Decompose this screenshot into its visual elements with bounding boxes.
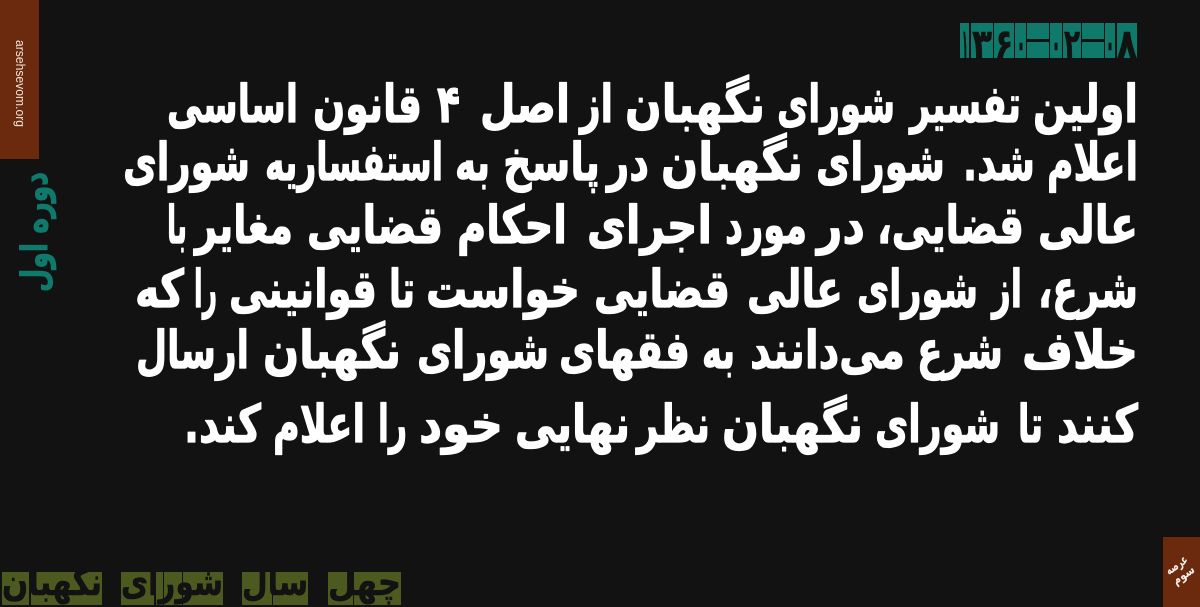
line 3: مغایر bbox=[193, 196, 293, 256]
line 2: در bbox=[605, 133, 649, 193]
logo calligraphy bbox=[1163, 552, 1198, 588]
line 5: ارسال bbox=[136, 321, 249, 381]
line 2: به bbox=[455, 133, 490, 193]
line 4: که bbox=[135, 260, 185, 320]
line 2: شد. bbox=[963, 133, 1035, 193]
line 3: با bbox=[167, 196, 187, 256]
series title: نگهبان bbox=[2, 560, 102, 604]
period label: دوره اول bbox=[15, 172, 56, 292]
logo tab bbox=[1163, 537, 1200, 607]
line 4: قضایی bbox=[594, 260, 730, 320]
line 6: نهایی bbox=[515, 395, 630, 455]
line 2: شورای bbox=[123, 133, 250, 193]
series title: چهل bbox=[328, 560, 401, 604]
line 4: شورای bbox=[857, 260, 978, 320]
line 6: خود bbox=[419, 395, 503, 455]
line 4: تا bbox=[389, 260, 415, 320]
line 3: قضایی، bbox=[877, 196, 1024, 256]
line 4: را bbox=[194, 260, 217, 320]
line 5: به bbox=[702, 321, 735, 381]
line 6: نظر bbox=[635, 395, 710, 455]
line 3: عالی bbox=[1038, 196, 1138, 256]
line 6: کند. bbox=[184, 395, 262, 455]
line 3: احکام bbox=[457, 196, 567, 256]
main text block bbox=[123, 74, 1139, 455]
line 1: تفسیر bbox=[908, 75, 1021, 135]
line 6: تا bbox=[1018, 395, 1043, 455]
line 6: اعلام bbox=[273, 395, 365, 455]
date stamp bbox=[960, 20, 1137, 68]
line 6: نگهبان bbox=[722, 394, 863, 455]
line 1: نگهبان bbox=[625, 74, 765, 135]
line 3: مورد bbox=[725, 196, 807, 256]
line 6: را bbox=[378, 395, 407, 455]
line 1: اساسی bbox=[167, 75, 298, 135]
line 1: اصل bbox=[480, 75, 570, 135]
series title bbox=[2, 560, 401, 605]
line 1: قانون bbox=[313, 75, 422, 135]
line 5: خلاف bbox=[1022, 321, 1138, 381]
date stamp: ۲ bbox=[1064, 20, 1080, 68]
date stamp: ۰ bbox=[1016, 20, 1026, 68]
line 5: می‌دانند bbox=[750, 321, 905, 381]
line 1: از bbox=[578, 75, 613, 135]
date stamp: ۰ bbox=[1105, 20, 1115, 68]
line 1: اولین bbox=[1033, 75, 1138, 135]
line 4: شرع، bbox=[1038, 260, 1138, 320]
line 2: نگهبان bbox=[661, 132, 803, 193]
line 4: قوانینی bbox=[229, 260, 377, 320]
line 3: قضایی bbox=[307, 196, 443, 256]
line 1: شورای bbox=[777, 75, 895, 135]
line 6 bbox=[184, 394, 1139, 455]
date stamp: ۸ bbox=[1117, 20, 1137, 68]
line 6: کنند bbox=[1057, 395, 1139, 455]
line 1: ۴ bbox=[437, 75, 460, 135]
line 3: اجرای bbox=[587, 196, 712, 256]
line 4: خواست bbox=[426, 260, 580, 320]
line 2: شورای bbox=[816, 133, 945, 193]
line 2: اعلام bbox=[1047, 133, 1138, 193]
line 2: استفساریه bbox=[265, 133, 443, 193]
line 5: نگهبان bbox=[263, 320, 401, 381]
line 1 bbox=[167, 74, 1138, 135]
website label: arsehsevom.org bbox=[13, 40, 27, 127]
line 4: از bbox=[990, 260, 1022, 320]
date stamp: ۱ bbox=[962, 20, 968, 68]
line 6: شورای bbox=[875, 395, 1000, 455]
line 4: عالی bbox=[747, 260, 843, 320]
line 3: در bbox=[814, 196, 865, 256]
series title: سال bbox=[242, 560, 308, 604]
panel: website tab bbox=[0, 0, 39, 159]
line 2: پاسخ bbox=[503, 133, 600, 193]
date stamp: ۳ bbox=[972, 20, 992, 68]
date stamp: ۰ bbox=[1051, 20, 1061, 68]
line 5: شرع bbox=[917, 321, 1003, 381]
date stamp: ۶ bbox=[995, 20, 1013, 68]
line 2 bbox=[123, 132, 1138, 193]
line 3 bbox=[167, 196, 1138, 256]
line 5: شورای bbox=[417, 321, 549, 381]
line 5 bbox=[136, 320, 1138, 381]
line 5: فقهای bbox=[559, 321, 690, 381]
line 4 bbox=[135, 260, 1138, 320]
series title: شورای bbox=[121, 560, 223, 604]
